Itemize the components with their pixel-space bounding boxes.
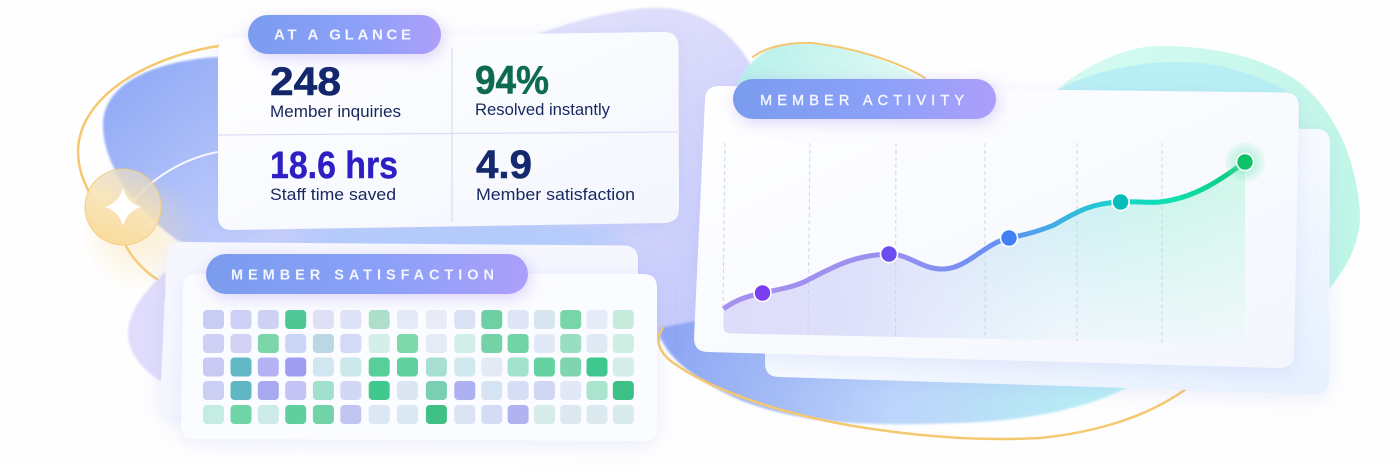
panel: member satisfaction	[160, 242, 657, 441]
panel: at a glance	[218, 32, 679, 230]
area fade overlay	[935, 225, 1245, 344]
stat: resolved instantly: Resolved instantly	[475, 101, 611, 119]
stat: staff time saved	[270, 145, 398, 204]
stat: member satisfaction	[476, 143, 635, 204]
heading pill: member activity: MEMBER ACTIVITY	[760, 93, 964, 109]
heading pill: at a glance: AT A GLANCE	[274, 26, 411, 44]
heatmap	[203, 310, 634, 424]
stat: resolved instantly: 94%	[475, 58, 549, 102]
heading pill: at a glance	[248, 15, 441, 54]
stat: member inquiries: Member inquiries	[270, 103, 401, 121]
front card	[694, 86, 1299, 368]
heading pill: member activity	[733, 79, 996, 119]
back card	[765, 125, 1330, 394]
stat: member satisfaction: Member satisfaction	[476, 186, 635, 204]
stat: member satisfaction: 4.9	[476, 143, 532, 187]
stat: resolved instantly	[475, 58, 611, 119]
back card	[160, 242, 638, 417]
stat: member inquiries	[270, 60, 401, 121]
icon: four-point star	[105, 188, 141, 226]
stat: staff time saved: Staff time saved	[270, 186, 396, 204]
gold ring arcs	[78, 43, 1186, 439]
area fill	[724, 162, 1245, 344]
panel: member activity	[694, 86, 1330, 394]
line chart	[723, 142, 1265, 344]
heading pill: member satisfaction	[206, 254, 528, 294]
stat: member inquiries: 248	[270, 60, 341, 104]
stat: staff time saved: 18.6 hrs	[270, 145, 398, 187]
point markers	[754, 142, 1265, 302]
white orbit arc	[132, 152, 218, 204]
trend line	[724, 162, 1245, 309]
front card	[181, 274, 657, 441]
sparkle badge	[80, 169, 200, 292]
heading pill: member satisfaction: MEMBER SATISFACTION	[231, 268, 494, 284]
